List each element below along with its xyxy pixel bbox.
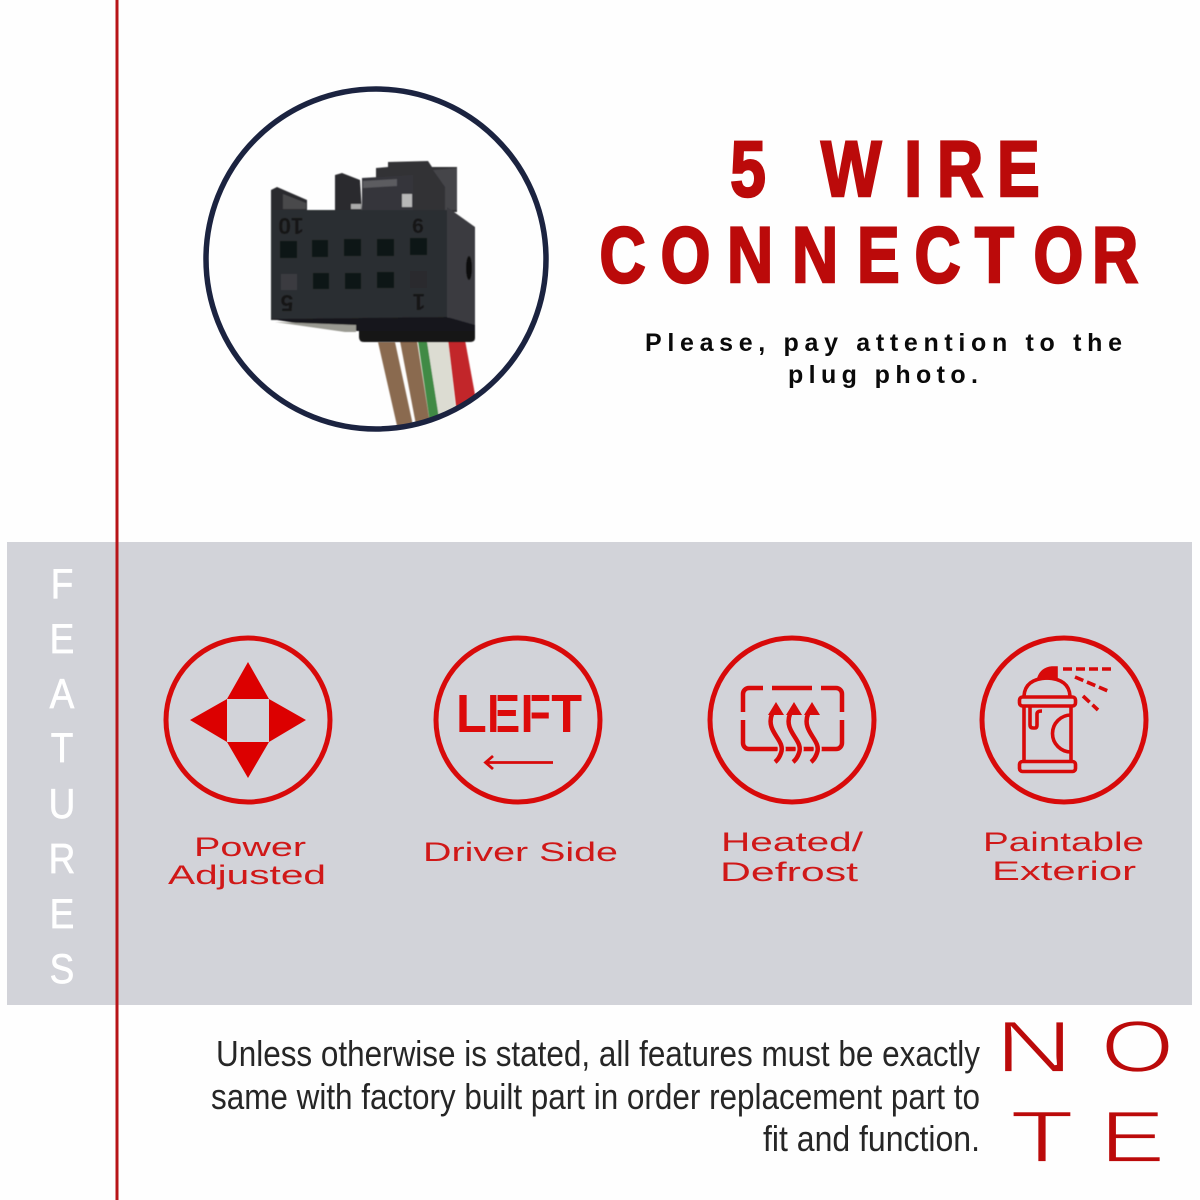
circle outline <box>206 89 546 429</box>
heading: FEATURES vertical: S <box>50 946 74 993</box>
icon: spray can <box>982 638 1146 802</box>
wires <box>378 340 476 430</box>
note text: same with factory built part in order replacement part to <box>211 1076 980 1117</box>
feature: heated defrost <box>710 638 874 887</box>
icon: left arrow: LEFT <box>456 684 582 744</box>
feature: paintable exterior <box>982 638 1146 886</box>
icon: four way arrows <box>166 638 330 802</box>
pin numbers: 6 <box>412 215 424 238</box>
feature: driver side <box>423 638 618 867</box>
icon: left arrow <box>436 638 600 802</box>
label: Exterior <box>992 856 1136 886</box>
heading: FEATURES vertical: A <box>50 671 75 718</box>
socket holes <box>280 238 427 290</box>
heading: NOTE <box>995 1007 1174 1178</box>
heading: NOTE: N <box>995 1007 1073 1088</box>
pin numbers <box>278 213 425 316</box>
pin numbers: 10 <box>278 213 304 239</box>
heading: NOTE: T <box>1010 1097 1074 1178</box>
heading: FEATURES vertical: E <box>50 616 74 663</box>
heading: FEATURES vertical: U <box>49 781 75 828</box>
title: CONNECTOR <box>599 212 1138 300</box>
heading: FEATURES vertical: R <box>49 836 75 883</box>
heading: NOTE: O <box>1101 1007 1174 1088</box>
icon: rear defrost <box>710 638 874 802</box>
note text <box>211 1033 980 1159</box>
panel: features band <box>7 542 1192 1005</box>
connector photo circle <box>206 89 546 430</box>
label <box>168 832 326 890</box>
label <box>983 827 1144 886</box>
title: 5 WIRE <box>730 126 1040 214</box>
pin numbers: 1 <box>412 289 425 315</box>
connector body <box>271 161 475 342</box>
label: Paintable <box>983 827 1144 857</box>
heading: NOTE: E <box>1100 1097 1165 1178</box>
label: Adjusted <box>168 860 326 890</box>
note text: Unless otherwise is stated, all features must be exactly <box>216 1033 980 1074</box>
label: Defrost <box>720 857 859 887</box>
heading: FEATURES vertical: F <box>51 561 73 608</box>
subtitle <box>645 329 1122 389</box>
label: Power <box>194 832 306 862</box>
pin numbers: 5 <box>280 290 293 316</box>
label: Driver Side <box>423 837 618 867</box>
heading: FEATURES vertical: T <box>51 725 73 772</box>
heading: FEATURES vertical: E <box>50 891 74 938</box>
note text: fit and function. <box>763 1118 980 1159</box>
vertical red line <box>116 0 118 1200</box>
label <box>720 827 864 887</box>
heading: FEATURES vertical <box>49 561 75 993</box>
title <box>599 126 1138 300</box>
subtitle: plug photo. <box>788 361 978 389</box>
feature: power adjusted <box>166 638 330 890</box>
subtitle: Please, pay attention to the <box>645 329 1122 357</box>
label: Heated/ <box>721 827 864 857</box>
